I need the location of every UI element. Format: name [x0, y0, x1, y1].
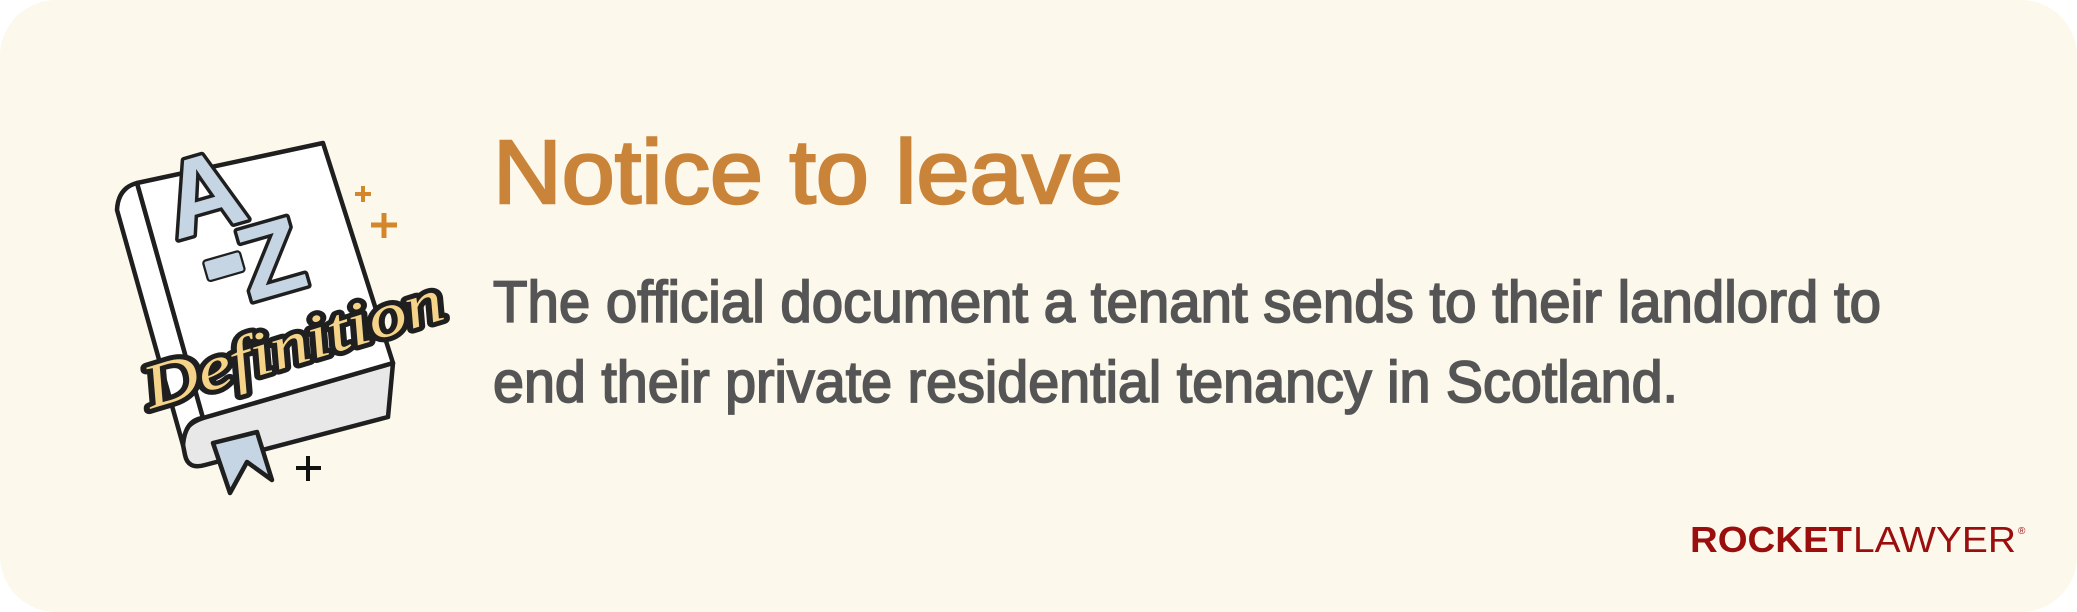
- letters A-Z: Z: [224, 195, 317, 324]
- letters A-Z: [149, 124, 317, 324]
- Definition script: Definition: [134, 266, 451, 422]
- icon: definition book: [117, 124, 451, 493]
- body text: [493, 270, 1881, 415]
- body text: The official document a tenant sends to their landlord to: [493, 270, 1881, 335]
- book cover: [137, 143, 393, 418]
- logo: Rocket Lawyer: ROCKET: [1690, 519, 1852, 560]
- title: Notice to leave: [493, 123, 1123, 223]
- icon: sparkles: [296, 186, 397, 481]
- body text: end their private residential tenancy in Scotland.: [493, 350, 1678, 415]
- logo: Rocket Lawyer: ®: [2018, 526, 2026, 537]
- book spine: [117, 183, 203, 445]
- book pages bottom: [182, 363, 393, 466]
- letters A-Z: A: [149, 124, 257, 262]
- logo: Rocket Lawyer: LAWYER: [1853, 519, 2016, 560]
- logo: Rocket Lawyer: [1690, 519, 2026, 560]
- bookmark: [213, 432, 272, 493]
